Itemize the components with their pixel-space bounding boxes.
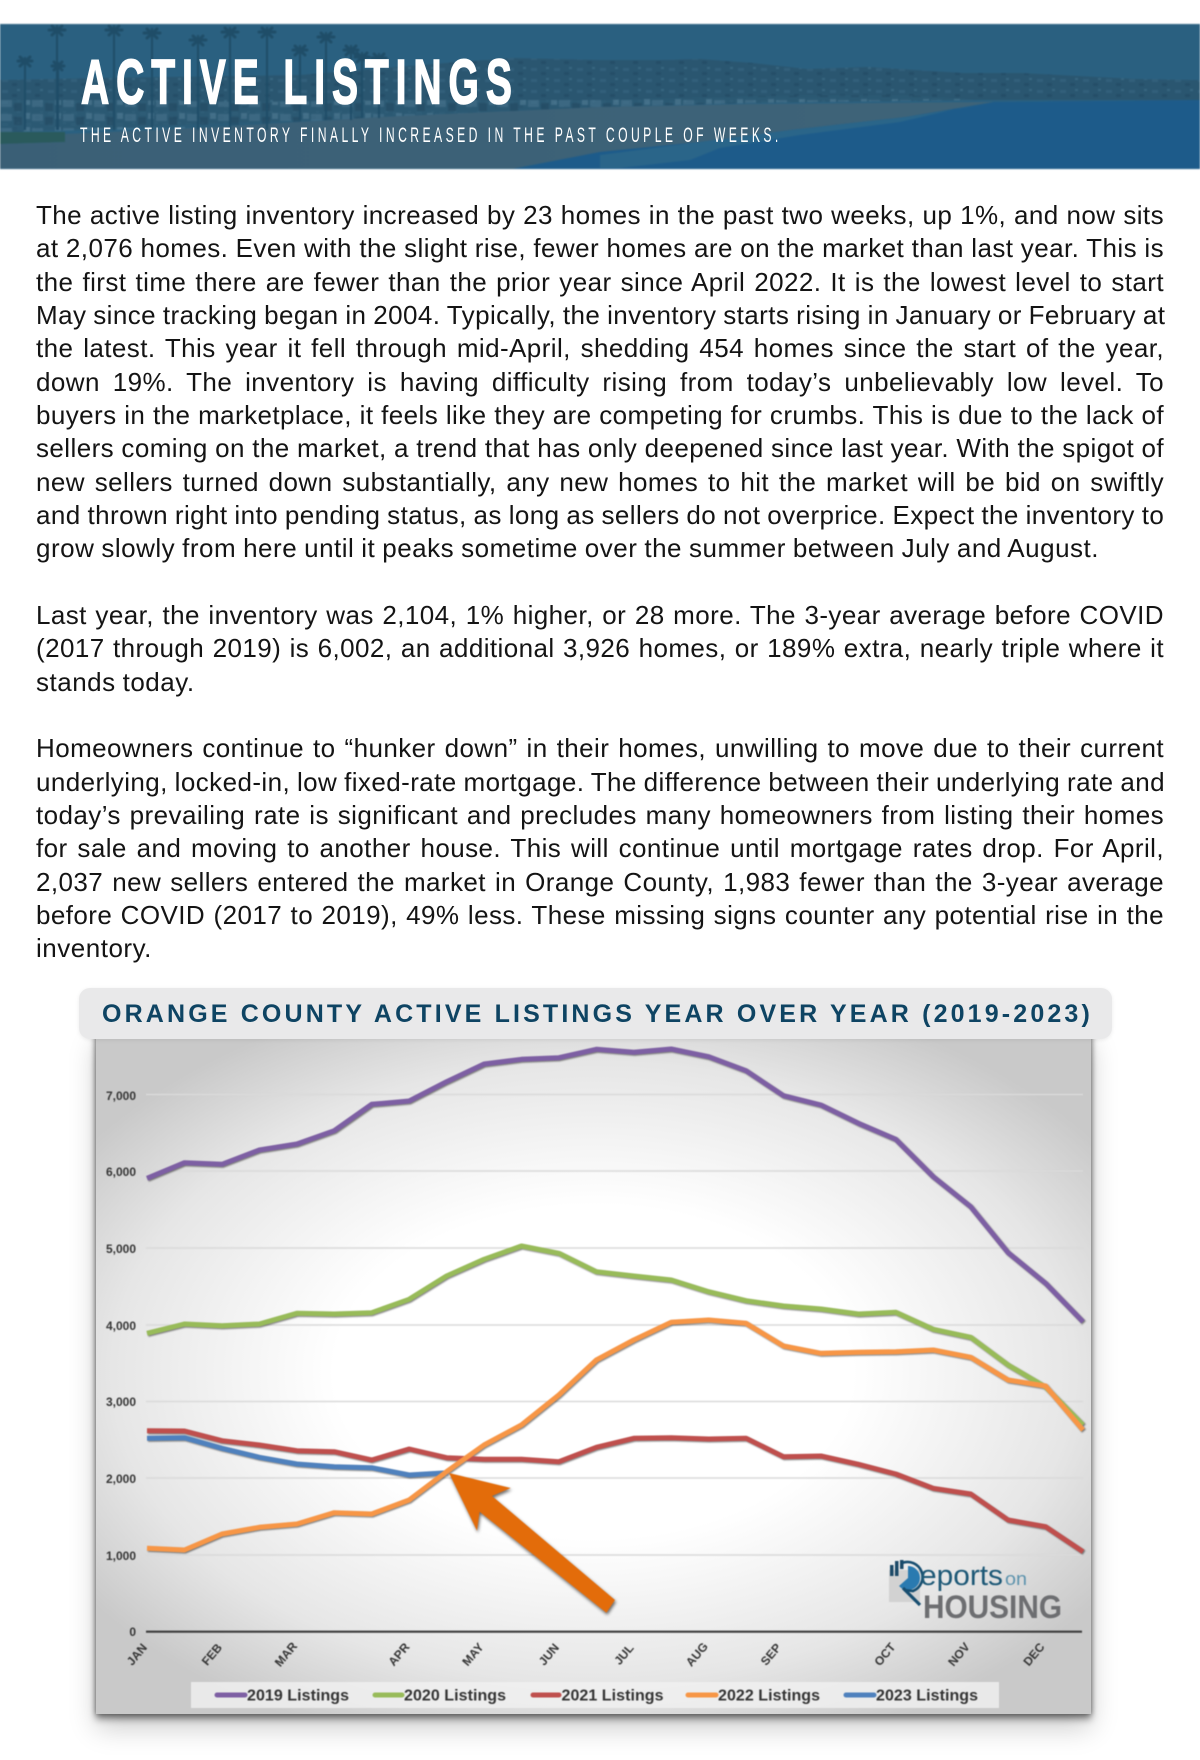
subheading: THE ACTIVE INVENTORY FINALLY INCREASED IN THE PAST COUPLE OF WEEKS.	[80, 122, 778, 147]
body text: inventory.	[36, 933, 152, 963]
logo: reports on housing: HOUSING	[923, 1589, 1062, 1625]
header banner	[0, 23, 1200, 170]
body text: buyers in the marketplace, it feels like they are competing for crumbs. This is due to the lack of	[36, 400, 1164, 430]
month labels: SEP	[758, 1641, 784, 1668]
y axis labels: 0	[129, 1625, 136, 1639]
legend: 2019 Listings	[247, 1688, 349, 1704]
panel: chart background	[96, 1030, 1091, 1714]
title bar: chart heading	[79, 988, 1112, 1039]
body text: (2017 through 2019) is 6,002, an additional 3,926 homes, or 189% extra, nearly triple where it	[36, 633, 1164, 663]
body text: underlying, locked-in, low fixed-rate mortgage. The difference between their underlying rate and	[36, 767, 1165, 797]
month labels: MAR	[272, 1639, 300, 1669]
legend: 2021 Listings	[562, 1688, 664, 1704]
legend: 2023 Listings	[876, 1688, 978, 1704]
grid lines	[146, 1094, 1083, 1555]
legend: 2022 Listings	[718, 1688, 820, 1704]
y axis labels: 7,000	[106, 1089, 136, 1103]
y axis labels: 3,000	[106, 1395, 136, 1409]
line: 2022 listings	[147, 1320, 1083, 1550]
body text: stands today.	[36, 667, 195, 697]
heading: active listings: ACTIVE LISTINGS	[81, 48, 512, 118]
line: 2019 listings	[147, 1049, 1083, 1322]
body text: the latest. This year it fell through mid-April, shedding 454 homes since the start of the year,	[36, 333, 1164, 363]
body text: May since tracking began in 2004. Typically, the inventory starts rising in January or February at	[36, 300, 1165, 330]
arrow: pointing at crossover	[449, 1473, 615, 1613]
legend: 2020 Listings	[404, 1688, 506, 1704]
body text: Homeowners continue to “hunker down” in their homes, unwilling to move due to their current	[36, 733, 1164, 763]
month labels: MAY	[459, 1640, 487, 1669]
month labels: JUN	[536, 1641, 562, 1668]
y axis labels: 2,000	[106, 1472, 136, 1486]
body text: sellers coming on the market, a trend that has only deepened since last year. With the spigot of	[36, 433, 1164, 463]
month labels: AUG	[683, 1640, 711, 1669]
month labels: APR	[385, 1640, 413, 1669]
body text: today’s prevailing rate is significant and precludes many homeowners from listing their homes	[36, 800, 1164, 830]
legend	[191, 1682, 999, 1708]
y axis labels: 5,000	[106, 1242, 136, 1256]
logo: reports on housing: eports	[920, 1560, 1003, 1592]
logo: reports on housing	[889, 1560, 1062, 1625]
body text: grow slowly from here until it peaks sometime over the summer between July and August.	[36, 533, 1099, 563]
month labels: OCT	[871, 1640, 899, 1669]
y axis labels: 1,000	[106, 1549, 136, 1563]
data lines	[147, 1049, 1083, 1552]
month labels: FEB	[199, 1640, 225, 1668]
month labels	[124, 1639, 1048, 1669]
body text: 2,037 new sellers entered the market in Orange County, 1,983 fewer than the 3-year average	[36, 867, 1164, 897]
month labels: DEC	[1020, 1640, 1048, 1669]
logo: reports on housing: on	[1005, 1569, 1027, 1589]
line: 2020 listings	[147, 1246, 1083, 1425]
line: 2021 listings	[147, 1431, 1083, 1552]
body text: down 19%. The inventory is having difficulty rising from today’s unbelievably low level. To	[36, 367, 1164, 397]
body text: for sale and moving to another house. This will continue until mortgage rates drop. For April,	[36, 833, 1164, 863]
body text: new sellers turned down substantially, any new homes to hit the market will be bid on swiftly	[36, 467, 1164, 497]
title bar: chart heading: ORANGE COUNTY ACTIVE LISTINGS YEAR OVER YEAR (2019-2023)	[102, 1000, 1093, 1028]
month labels: JUL	[611, 1641, 637, 1668]
x axis	[146, 1631, 1082, 1633]
body text: at 2,076 homes. Even with the slight rise, fewer homes are on the market than last year. This is	[36, 233, 1164, 263]
month labels: NOV	[945, 1640, 973, 1669]
month labels: JAN	[124, 1641, 150, 1668]
body text: and thrown right into pending status, as long as sellers do not overprice. Expect the inventory to	[36, 500, 1164, 530]
body text: Last year, the inventory was 2,104, 1% higher, or 28 more. The 3-year average before COVID	[36, 600, 1164, 630]
y axis labels: 6,000	[106, 1165, 136, 1179]
y axis labels: 4,000	[106, 1319, 136, 1333]
line: 2023 listings	[147, 1438, 448, 1475]
body text: the first time there are fewer than the prior year since April 2022. It is the lowest level to start	[36, 267, 1164, 297]
body text	[36, 200, 1165, 963]
y axis labels	[106, 1089, 136, 1639]
body text: before COVID (2017 to 2019), 49% less. These missing signs counter any potential rise in the	[36, 900, 1164, 930]
body text: The active listing inventory increased by 23 homes in the past two weeks, up 1%, and now sits	[36, 200, 1164, 230]
